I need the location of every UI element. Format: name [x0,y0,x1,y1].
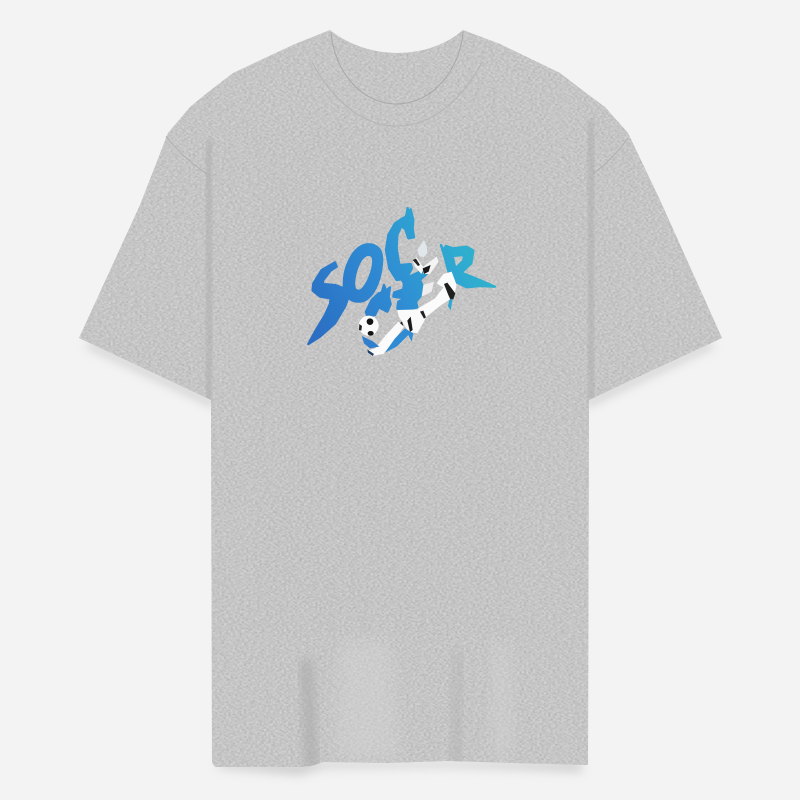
player figure [359,240,457,356]
fabric folds [206,120,594,770]
letter C (upper) [386,208,414,280]
letter R [441,245,495,287]
player kicking leg [362,322,413,356]
sleeve seams [166,136,628,174]
player head and arm [413,240,439,274]
letter O [344,244,382,302]
letter S [308,262,349,344]
collar seams [312,32,482,126]
letter C (lower) [366,285,391,317]
soccer graphic [308,208,495,356]
t-shirt [70,20,730,780]
letter E [393,270,427,309]
heather texture [70,20,730,780]
shirt drop shadow [84,342,716,775]
soccer ball [359,316,379,336]
shirt fabric [79,30,722,767]
lettering: SOCCER brush strokes [308,208,495,344]
player shorts [397,309,427,333]
player raised leg [417,272,457,317]
